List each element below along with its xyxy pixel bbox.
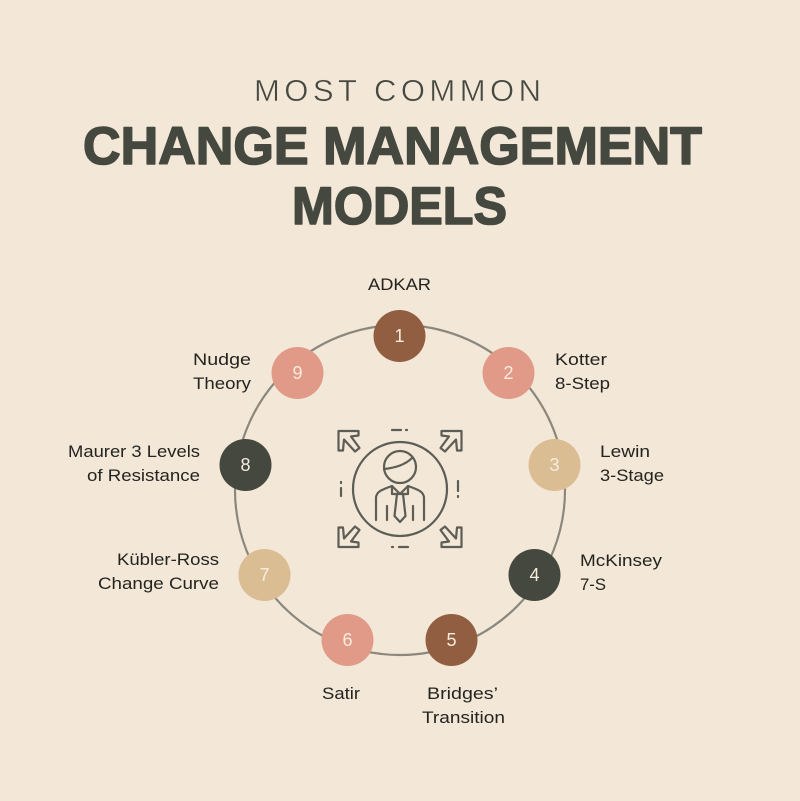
node 2: Kotter 8-Step: 8-Step [555, 375, 610, 393]
node 4: McKinsey 7-S: McKinsey [580, 552, 663, 570]
node 1: ADKAR [368, 276, 431, 362]
node 4: McKinsey 7-S [508, 549, 663, 601]
node 9: Nudge Theory: Nudge [193, 351, 251, 369]
node 9: Nudge Theory: 9 [292, 363, 303, 383]
title: main heading [83, 117, 702, 236]
node 3: Lewin 3-Stage: Lewin [600, 443, 650, 461]
node 7: Kubler-Ross Change Curve: 7 [259, 565, 270, 585]
icon: spark marks [341, 430, 458, 547]
node 1: ADKAR: ADKAR [368, 276, 431, 294]
node 3: Lewin 3-Stage: 3-Stage [600, 467, 664, 485]
node 3: Lewin 3-Stage [528, 439, 664, 491]
node 6: Satir: Satir [322, 685, 361, 703]
node 8: Maurer 3 Levels of Resistance: 8 [240, 455, 251, 475]
node 4: McKinsey 7-S: 4 [529, 565, 540, 585]
node 5: Bridges' Transition: Transition [422, 709, 505, 727]
node 7: Kubler-Ross Change Curve: Change Curve [98, 575, 219, 593]
node 1: ADKAR: 1 [394, 326, 405, 346]
title: main heading: MODELS [292, 177, 507, 236]
node 3: Lewin 3-Stage: 3 [549, 455, 560, 475]
node 9: Nudge Theory: Theory [193, 375, 252, 393]
node 6: Satir: 6 [342, 630, 353, 650]
icon: head [384, 451, 416, 483]
node 7: Kubler-Ross Change Curve: Kübler-Ross [117, 551, 219, 569]
node 8: Maurer 3 Levels of Resistance [68, 439, 272, 491]
icon: outer circle [353, 442, 447, 536]
node 5: Bridges' Transition: 5 [446, 630, 457, 650]
node 2: Kotter 8-Step [482, 347, 610, 399]
node 4: McKinsey 7-S: 7-S [580, 576, 606, 594]
title: subheading: MOST COMMON [254, 73, 541, 108]
title: main heading: CHANGE MANAGEMENT [83, 117, 702, 176]
node 2: Kotter 8-Step: 2 [503, 363, 514, 383]
node 5: Bridges' Transition [422, 614, 505, 727]
node 7: Kubler-Ross Change Curve [98, 549, 290, 601]
icon: arrow down-right [440, 526, 462, 547]
icon: body and tie [376, 486, 424, 522]
icon: arrow up-left [338, 431, 360, 452]
node 8: Maurer 3 Levels of Resistance: Maurer 3 Levels [68, 443, 200, 461]
title [83, 73, 702, 236]
node 6: Satir [322, 614, 374, 703]
node 5: Bridges' Transition: Bridges’ [427, 685, 498, 703]
icon: arrow down-left [338, 526, 360, 547]
node 8: Maurer 3 Levels of Resistance: of Resistance [87, 467, 200, 485]
icon: manager with outward arrows [338, 430, 462, 547]
node 9: Nudge Theory [193, 347, 324, 399]
icon: arrow up-right [440, 431, 462, 452]
ring connecting the models [235, 325, 565, 655]
node 2: Kotter 8-Step: Kotter [555, 351, 608, 369]
